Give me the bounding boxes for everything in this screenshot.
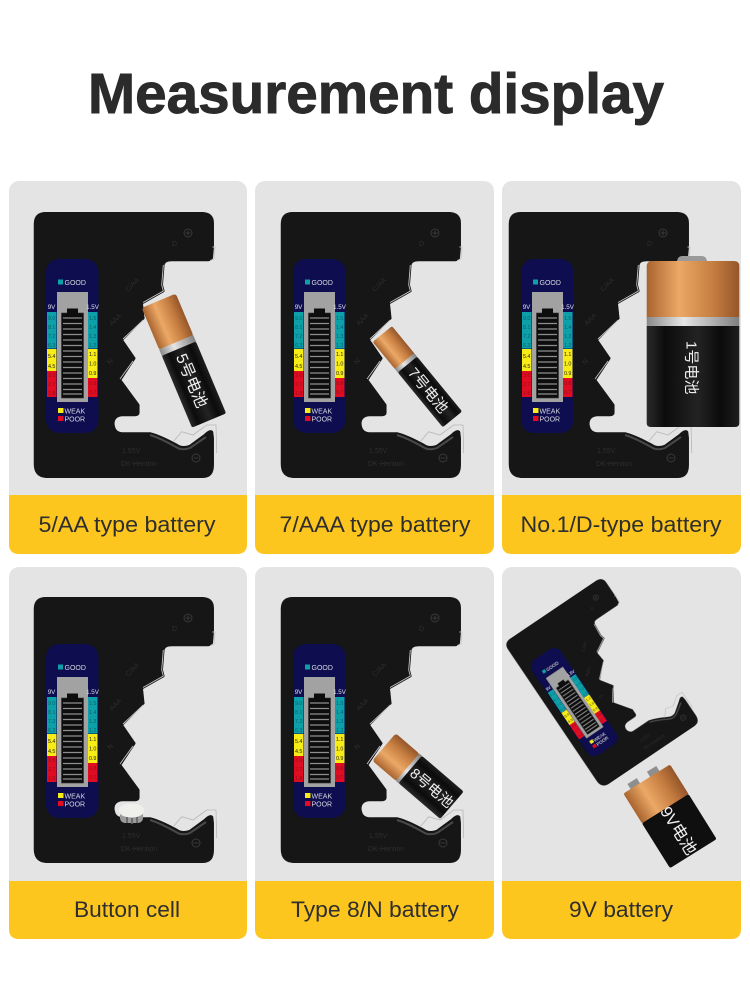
tester device: 6.3 (48, 343, 55, 349)
tester device: AAA (583, 312, 599, 327)
tester device: WEAK (64, 408, 85, 416)
tester device: 0.8 (89, 381, 96, 387)
tester device: 1.8 (523, 391, 530, 397)
tester device: 0.7 (336, 775, 343, 781)
tester device: 1.8 (295, 776, 302, 782)
tester device: 8.1 (48, 710, 55, 716)
tester device: 1.8 (48, 776, 55, 782)
tester device: 4.5 (48, 749, 55, 755)
tester device: D (419, 241, 424, 248)
battery: N (372, 733, 464, 819)
tester device: 9.0 (550, 692, 556, 698)
battery: AAA: 7号电池 (404, 365, 451, 417)
tester device: 1.3 (89, 719, 96, 725)
tester device: 1.4 (89, 325, 96, 331)
tester device: 7.2 (48, 719, 55, 725)
tester device: 5.4 (48, 354, 55, 360)
tester device (35, 598, 217, 862)
tester device: 7.2 (556, 701, 563, 708)
tester device: 1.2 (89, 343, 96, 349)
tester device: D (172, 241, 177, 248)
tester device: 5.4 (523, 354, 530, 360)
tester device: 1.4 (336, 325, 343, 331)
tester device: DK-Hention (368, 461, 404, 468)
tester device: 0.8 (564, 381, 571, 387)
tester device: 0.8 (336, 766, 343, 772)
tester device: 9.0 (48, 316, 55, 322)
tester device: 2.7 (48, 767, 55, 773)
label: Button cell: Button cell (74, 897, 180, 922)
tester device: 1.3 (336, 334, 343, 340)
tester device: 1.1 (89, 352, 96, 358)
tester device: 9V (48, 304, 56, 311)
tester device: 1.1 (89, 737, 96, 743)
label: No.1/D-type battery: No.1/D-type battery (520, 512, 722, 537)
tester device: 3.6 (295, 758, 302, 764)
tester device: 0.8 (89, 766, 96, 772)
tester device: 0.7 (599, 717, 606, 723)
tester device: 6.3 (560, 706, 566, 712)
tester device: 1.3 (564, 334, 571, 340)
tester device: 1.5 (89, 701, 96, 707)
tester device: WEAK (593, 730, 607, 743)
tester device: 0.7 (336, 390, 343, 396)
battery: button cell (118, 804, 144, 824)
tester device: DK-Hention (121, 846, 157, 853)
tester device: WEAK (540, 408, 560, 416)
tester device: 1.55V (369, 448, 388, 455)
tester device: 6.3 (48, 728, 55, 734)
tester device: 0.9 (564, 371, 571, 377)
tester device: 9.0 (48, 701, 55, 707)
tester device: 1.8 (48, 391, 55, 397)
tester device: C/AA (581, 640, 588, 652)
battery: D: 1号电池 (682, 341, 700, 394)
tester device: 8.1 (48, 325, 55, 331)
tester device: 0.7 (564, 390, 571, 396)
tester device: 7.2 (295, 719, 302, 725)
tester device: 4.5 (48, 364, 55, 370)
tester device: 5.4 (48, 739, 55, 745)
tester device: 0.9 (89, 756, 96, 762)
tester device: 8.1 (295, 325, 302, 331)
tester device: C/AA (371, 277, 388, 293)
tester device: 1.2 (582, 691, 588, 697)
tester device: 1.4 (575, 681, 582, 687)
tester device: 1.0 (336, 746, 343, 752)
tester device: POOR (312, 802, 332, 808)
tester device: 4.5 (523, 364, 530, 370)
label: 5/AA type battery: 5/AA type battery (38, 512, 216, 537)
tester device: AAA (108, 697, 124, 712)
tester device: 2.7 (523, 382, 530, 388)
tester device: C/AA (371, 662, 388, 678)
tester device: 0.9 (336, 756, 343, 762)
tester device: N (106, 743, 115, 751)
tester device: 1.5V (86, 689, 100, 696)
tester device: 0.9 (592, 707, 599, 713)
battery: 9V: 9V电池 (656, 803, 701, 858)
tester device: 1.5V (333, 689, 347, 696)
tester device: 1.5V (86, 304, 100, 311)
tester device: GOOD (540, 280, 561, 287)
panel: 7/AAA type battery (255, 181, 494, 554)
tester device: 6.3 (295, 343, 302, 349)
tester device: GOOD (312, 665, 333, 672)
tester device: 1.0 (89, 362, 96, 368)
tester device: 2.7 (295, 767, 302, 773)
tester device: N (353, 743, 362, 751)
tester device: 8.1 (553, 697, 559, 703)
tester device: 5.4 (564, 712, 570, 718)
battery: AAA (373, 326, 462, 427)
panel: Button cell (9, 567, 247, 939)
tester device: POOR (64, 416, 85, 424)
tester device: 9V (295, 304, 303, 311)
tester device: C/AA (124, 662, 141, 678)
tester device: 1.5V (333, 304, 347, 311)
tester device: 1.1 (336, 737, 343, 743)
tester device: 3.6 (571, 723, 577, 729)
tester device (282, 213, 464, 477)
tester device: 1.55V (122, 448, 141, 455)
tester device: 1.2 (564, 343, 571, 349)
tester device: 2.7 (574, 728, 580, 734)
tester device: N (598, 695, 603, 699)
tester device: 6.3 (295, 728, 302, 734)
tester device: N (353, 358, 362, 366)
tester device: 1.0 (564, 362, 571, 368)
battery: N: 8号电池 (406, 765, 456, 811)
tester device: 9.0 (523, 316, 530, 322)
panel: 5/AA type battery (9, 181, 247, 554)
label: Type 8/N battery: Type 8/N battery (291, 897, 459, 922)
tester device: 1.0 (89, 746, 96, 752)
tester device: 6.3 (523, 343, 530, 349)
battery: D (647, 256, 739, 427)
tester device: GOOD (312, 280, 333, 287)
tester device: AAA (585, 666, 591, 677)
tester device: AAA (108, 312, 124, 327)
battery: AA (142, 294, 226, 428)
tester device: C/AA (124, 277, 141, 293)
tester device: 0.9 (89, 371, 96, 377)
tester device: D (172, 626, 177, 633)
tester device: 1.3 (89, 334, 96, 340)
tester device: GOOD (64, 665, 86, 672)
tester device: 8.1 (523, 325, 530, 331)
tester device: 1.5 (564, 316, 571, 322)
panel: No.1/D-type battery (502, 181, 741, 554)
tester device: 0.8 (596, 712, 602, 718)
tester device: 1.8 (577, 733, 584, 739)
tester device: DK-Hention (596, 461, 632, 468)
tester device: 5.4 (295, 354, 302, 360)
tester device: 9V (545, 685, 552, 692)
tester device: 1.1 (585, 696, 592, 702)
tester device: 1.3 (579, 686, 585, 692)
tester device: 1.0 (336, 362, 343, 368)
tester device: 2.7 (48, 382, 55, 388)
tester device: 9.0 (295, 316, 302, 322)
tester device: D (647, 241, 652, 248)
tester device: 1.2 (336, 343, 343, 349)
tester device: 1.1 (564, 352, 571, 358)
battery: 9V (620, 759, 717, 868)
tester device: POOR (540, 416, 560, 424)
tester device: POOR (596, 735, 610, 747)
tester device: 1.55V (597, 448, 616, 455)
tester device: D (419, 626, 424, 633)
tester device: 4.5 (295, 364, 302, 370)
tester device: GOOD (64, 280, 86, 287)
tester device: D (590, 605, 596, 611)
tester device: 1.55V (369, 833, 388, 840)
tester device: 9V (523, 304, 531, 311)
tester device: DK-Hention (643, 733, 666, 751)
battery: AA: 5号电池 (172, 351, 211, 411)
tester device (505, 576, 701, 787)
tester device: 3.6 (523, 373, 530, 379)
tester device: POOR (64, 802, 85, 808)
tester device: DK-Hention (368, 846, 404, 853)
tester device: 0.7 (89, 390, 96, 396)
tester device: POOR (312, 416, 332, 424)
tester device: 1.5V (561, 304, 575, 311)
tester device: 0.9 (336, 371, 343, 377)
tester device: 4.5 (567, 718, 574, 724)
tester device: 1.4 (89, 710, 96, 716)
tester device: AAA (355, 697, 371, 712)
tester device: 1.0 (589, 701, 595, 707)
tester device: 9.0 (295, 701, 302, 707)
tester device: 1.5 (572, 676, 578, 683)
tester device: 1.55V (639, 732, 652, 743)
tester device: 0.8 (336, 381, 343, 387)
tester device: 7.2 (48, 334, 55, 340)
tester device: 1.2 (336, 728, 343, 734)
tester device: DK-Hention (121, 461, 157, 468)
tester device: 1.8 (295, 391, 302, 397)
tester device: 2.7 (295, 382, 302, 388)
tester device: 3.6 (48, 758, 55, 764)
panel: Type 8/N battery (255, 567, 494, 939)
tester device: 0.7 (89, 775, 96, 781)
title: Measurement display (88, 62, 665, 125)
tester device: 7.2 (295, 334, 302, 340)
tester device: 8.1 (295, 710, 302, 716)
tester device: 3.6 (295, 373, 302, 379)
tester device: 3.6 (48, 373, 55, 379)
tester device: 1.4 (336, 710, 343, 716)
tester device: 1.5 (336, 701, 343, 707)
tester device: 1.5 (89, 316, 96, 322)
tester device: 9V (48, 689, 56, 696)
tester device: WEAK (312, 408, 332, 416)
tester device: 1.55V (122, 833, 141, 840)
tester device (35, 213, 217, 477)
tester device: GOOD (545, 660, 560, 672)
label: 9V battery: 9V battery (569, 897, 673, 922)
tester device: 9V (295, 689, 303, 696)
tester device: 7.2 (523, 334, 530, 340)
tester device: 1.4 (564, 325, 571, 331)
tester device: 4.5 (295, 749, 302, 755)
tester device: C/AA (599, 277, 616, 293)
tester device: WEAK (312, 794, 332, 800)
label: 7/AAA type battery: 7/AAA type battery (280, 512, 470, 537)
tester device: N (581, 358, 590, 366)
tester device: WEAK (64, 794, 85, 800)
tester device: AAA (355, 312, 371, 327)
tester device: 1.2 (89, 728, 96, 734)
tester device: N (106, 358, 115, 366)
tester device: 1.5 (336, 316, 343, 322)
tester device (282, 598, 464, 862)
panel: 9V battery (502, 567, 741, 939)
tester device (510, 213, 692, 477)
tester device: 1.3 (336, 719, 343, 725)
tester device: 1.1 (336, 352, 343, 358)
tester device: 5.4 (295, 739, 302, 745)
tester device: 1.5V (566, 669, 576, 678)
